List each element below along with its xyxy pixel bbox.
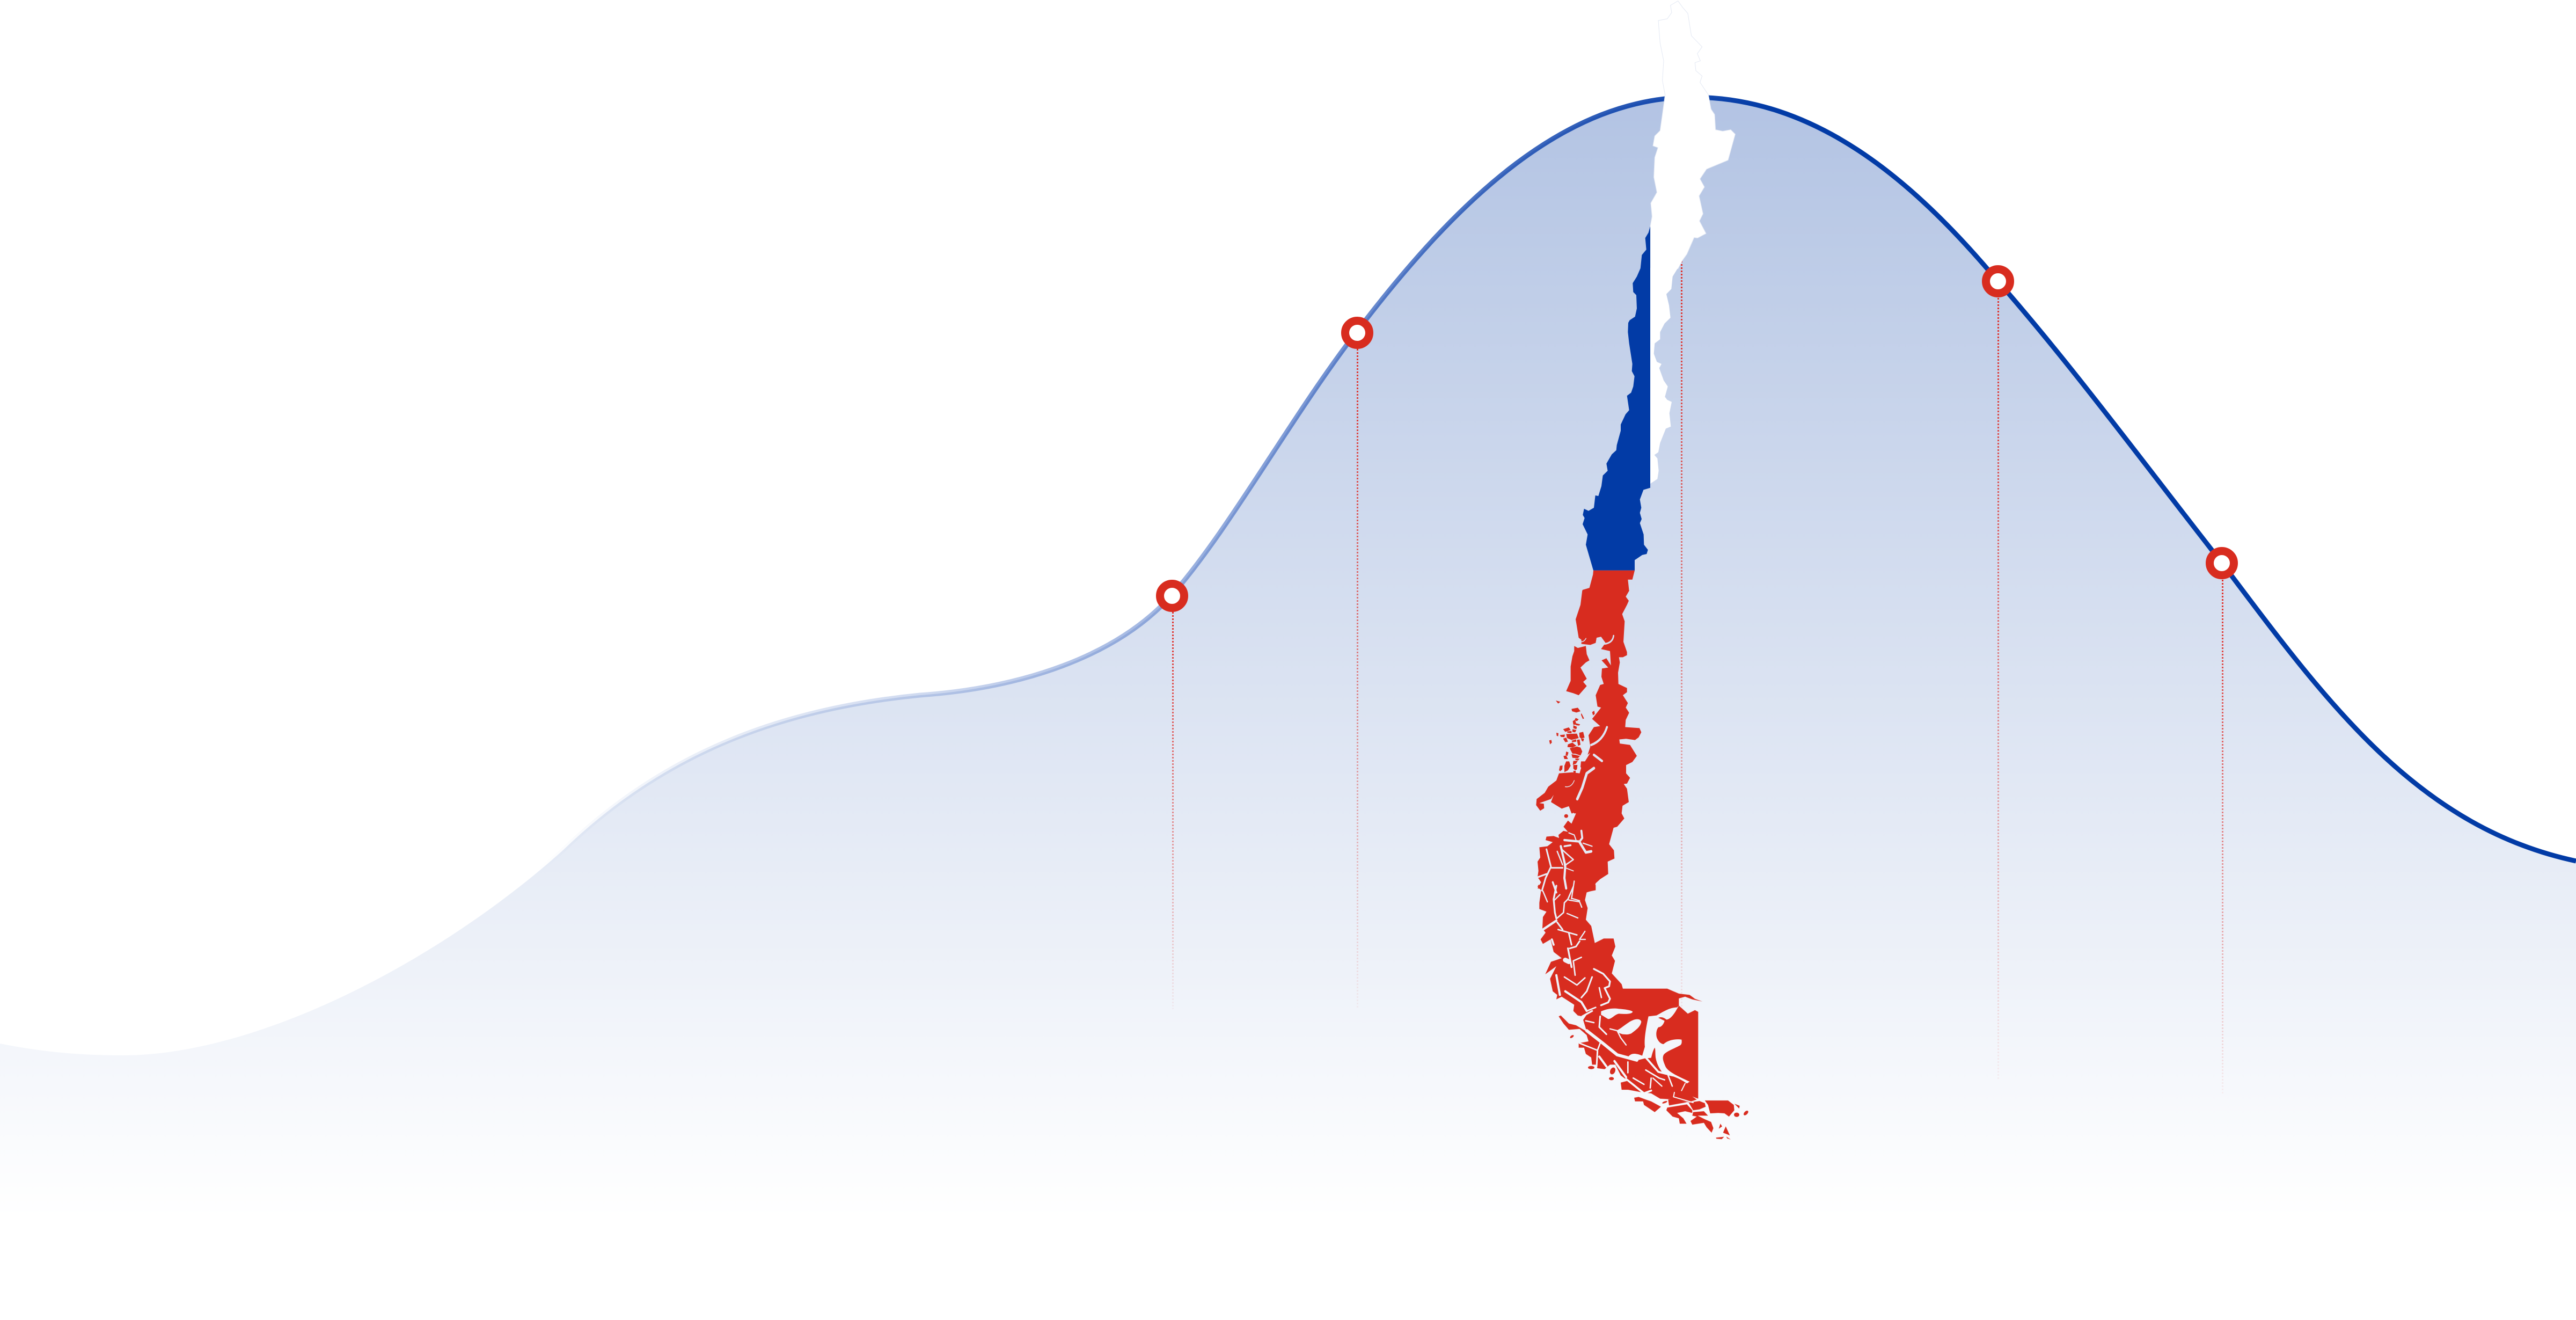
red: Chiloe island: [1566, 646, 1590, 695]
marker 2: [1345, 321, 1370, 345]
red: long outer island: [1558, 1016, 1587, 1035]
map: red southern section: [1536, 571, 1749, 1140]
red: Tierra del Fuego islands: [1666, 1104, 1692, 1124]
red: upper mainland: [1582, 571, 1635, 591]
marker 3: [1986, 269, 2010, 293]
red: Chonos archipelago islands: [1549, 701, 1595, 776]
map: white northern section: [1650, 1, 1735, 484]
map of Chile: [1536, 1, 1749, 1140]
marker 1: [1160, 584, 1184, 608]
marker 4: [2210, 551, 2234, 575]
dotted drop lines: [1173, 258, 2223, 1095]
curve line: [0, 97, 2576, 1055]
map: blue central section: [1583, 227, 1650, 571]
red: southern Patagonia and Magallanes: [1538, 885, 1749, 1140]
red: lakes district and central Patagonia: [1536, 590, 1641, 893]
marker rings: [1160, 269, 2234, 608]
